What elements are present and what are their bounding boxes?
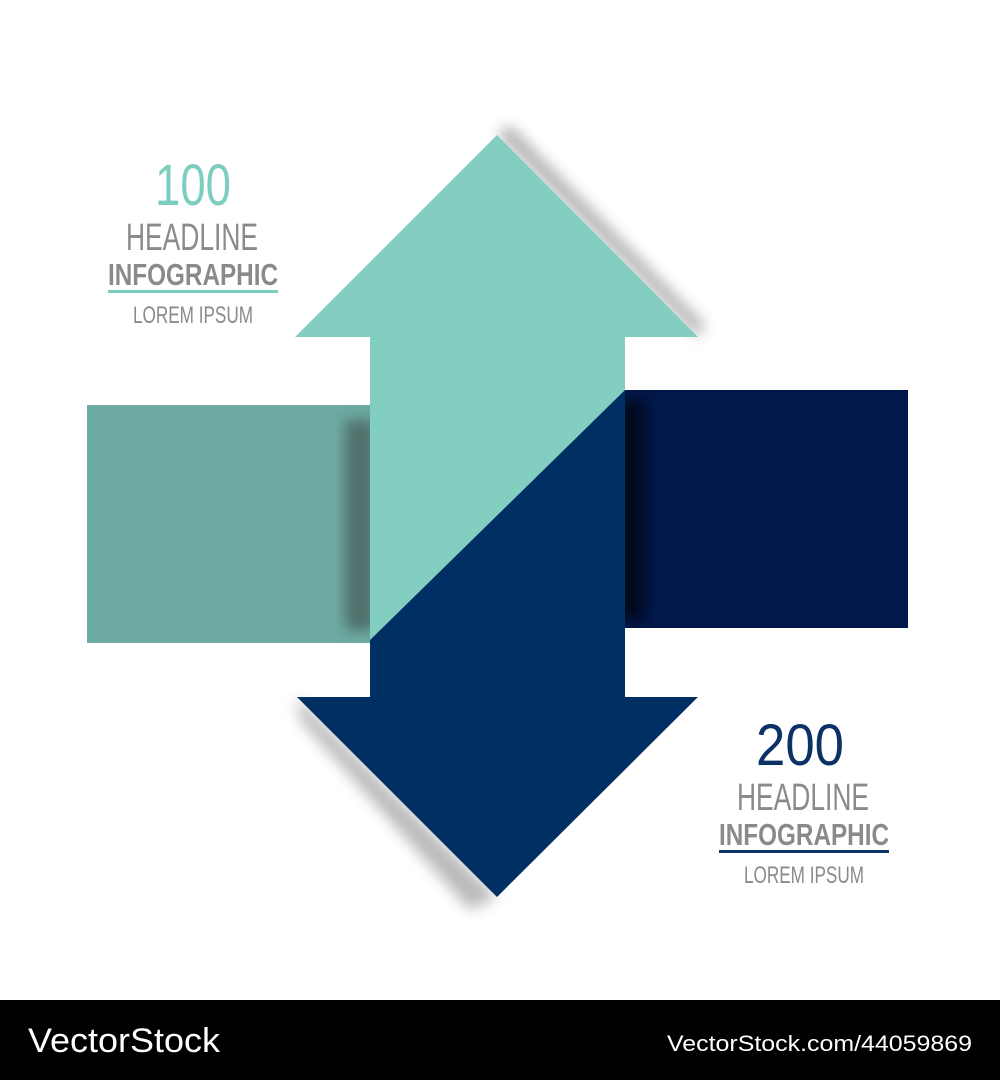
- arrow: down navy: [297, 390, 698, 897]
- text block: 200: [719, 713, 889, 889]
- text block: 200: LOREM IPSUM: [744, 862, 864, 889]
- text block: 100: LOREM IPSUM: [133, 302, 253, 329]
- text block: 100: [108, 153, 278, 329]
- footer bar: [0, 1000, 1000, 1080]
- panel: left teal rectangle: [87, 405, 370, 643]
- shadows: [297, 125, 705, 910]
- text block: 200: 200: [756, 713, 844, 778]
- panel: right navy rectangle: [625, 390, 908, 628]
- text block: 100: HEADLINE: [126, 217, 258, 259]
- footer bar: VectorStock.com/44059869: [667, 1031, 972, 1056]
- text block: 200: HEADLINE: [737, 777, 869, 819]
- footer bar: VectorStock: [28, 1022, 221, 1060]
- text block: 100: 100: [155, 153, 231, 218]
- text block: 100: INFOGRAPHIC: [108, 257, 278, 292]
- text block: 200: INFOGRAPHIC: [719, 817, 889, 852]
- arrow: up teal: [295, 135, 698, 640]
